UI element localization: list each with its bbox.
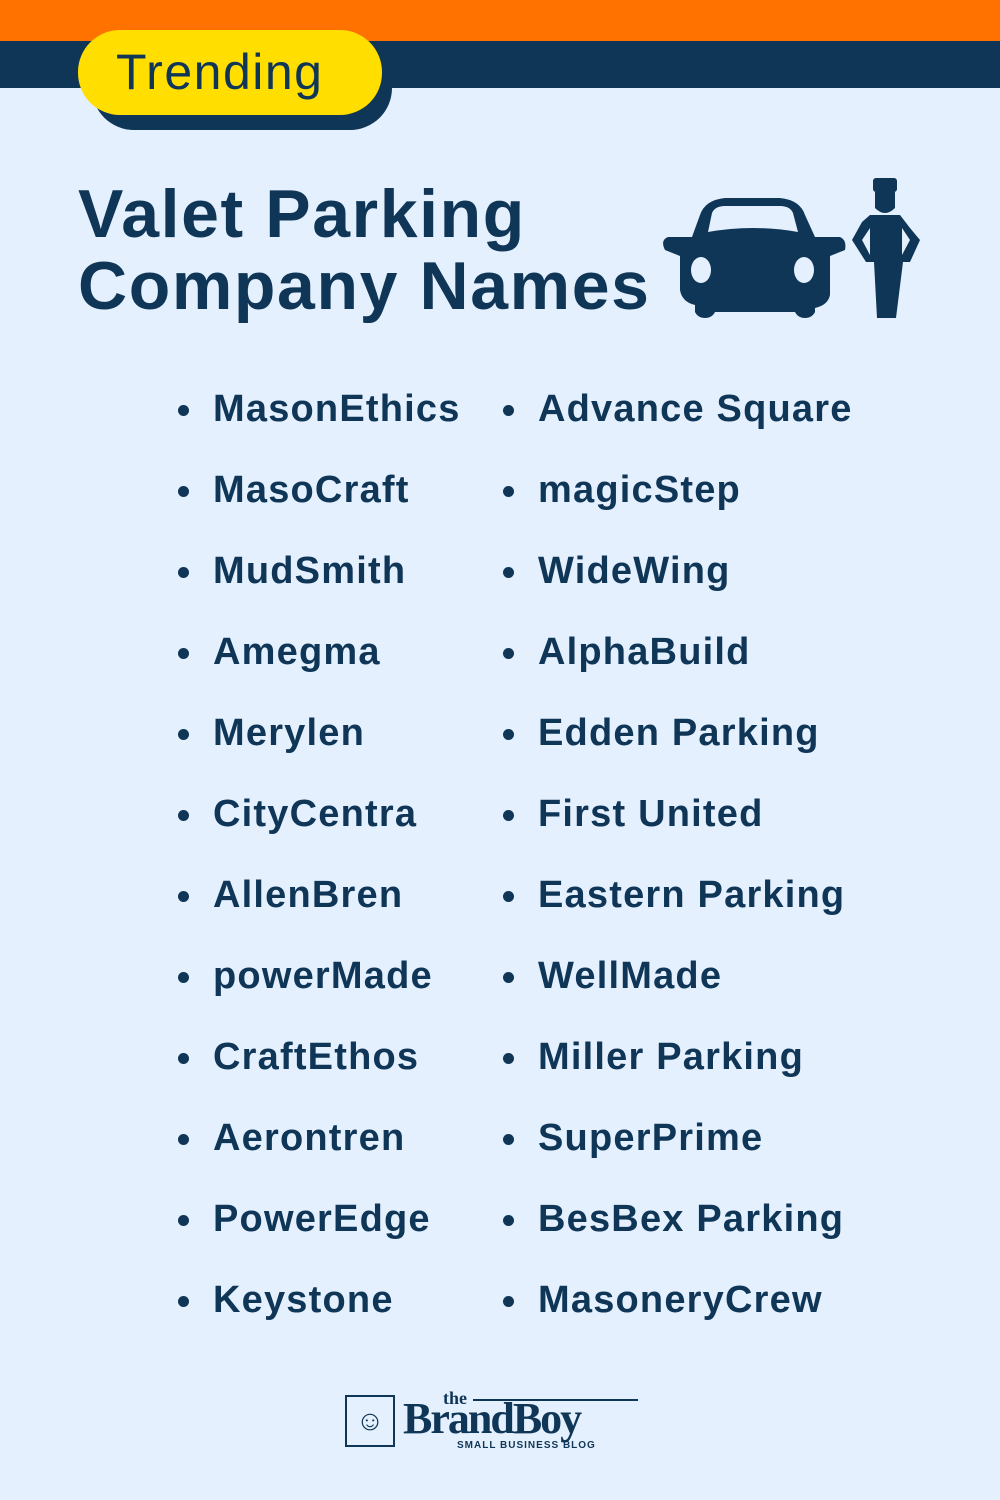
logo: theBrandBoy: the	[443, 1388, 467, 1408]
list column 2: MasoneryCrew	[538, 1279, 823, 1321]
list column 2: Eastern Parking	[538, 874, 845, 916]
list column 1: CraftEthos	[213, 1036, 419, 1078]
list column 2: SuperPrime	[538, 1117, 763, 1159]
list column 1: Amegma	[213, 631, 381, 673]
list column 2: Edden Parking	[538, 712, 820, 754]
title: Company Names	[78, 248, 651, 324]
list column 1: Keystone	[213, 1279, 394, 1321]
list column 2	[503, 388, 853, 1321]
list column 2: First United	[538, 793, 764, 835]
navy header band	[0, 41, 1000, 88]
logo: theBrandBoy: ☺	[356, 1405, 384, 1436]
list column 1: MasonEthics	[213, 388, 461, 430]
list column 2: WellMade	[538, 955, 722, 997]
logo: theBrandBoy: SMALL BUSINESS BLOG	[457, 1440, 596, 1451]
title: Valet Parking	[78, 176, 526, 252]
list column 1: Aerontren	[213, 1117, 405, 1159]
list column 2: Advance Square	[538, 388, 853, 430]
logo: theBrandBoy: BrandBoy	[403, 1394, 580, 1443]
list column 1: MudSmith	[213, 550, 406, 592]
pill shadow	[92, 45, 392, 130]
list column 2: magicStep	[538, 469, 741, 511]
list column 1: PowerEdge	[213, 1198, 431, 1240]
orange top band	[0, 0, 1000, 41]
list column 2: Miller Parking	[538, 1036, 804, 1078]
title	[78, 176, 651, 324]
list column 1: MasoCraft	[213, 469, 410, 511]
list column 1: AllenBren	[213, 874, 403, 916]
list column 2: WideWing	[538, 550, 731, 592]
list column 1	[178, 388, 461, 1321]
list column 2: BesBex Parking	[538, 1198, 844, 1240]
list column 1: powerMade	[213, 955, 433, 997]
logo: theBrandBoy	[345, 1388, 638, 1451]
list column 2: AlphaBuild	[538, 631, 751, 673]
badge: Trending: Trending	[116, 44, 323, 100]
list column 1: CityCentra	[213, 793, 417, 835]
badge: Trending	[78, 30, 382, 115]
list column 1: Merylen	[213, 712, 365, 754]
icon: car and valet	[663, 178, 920, 318]
